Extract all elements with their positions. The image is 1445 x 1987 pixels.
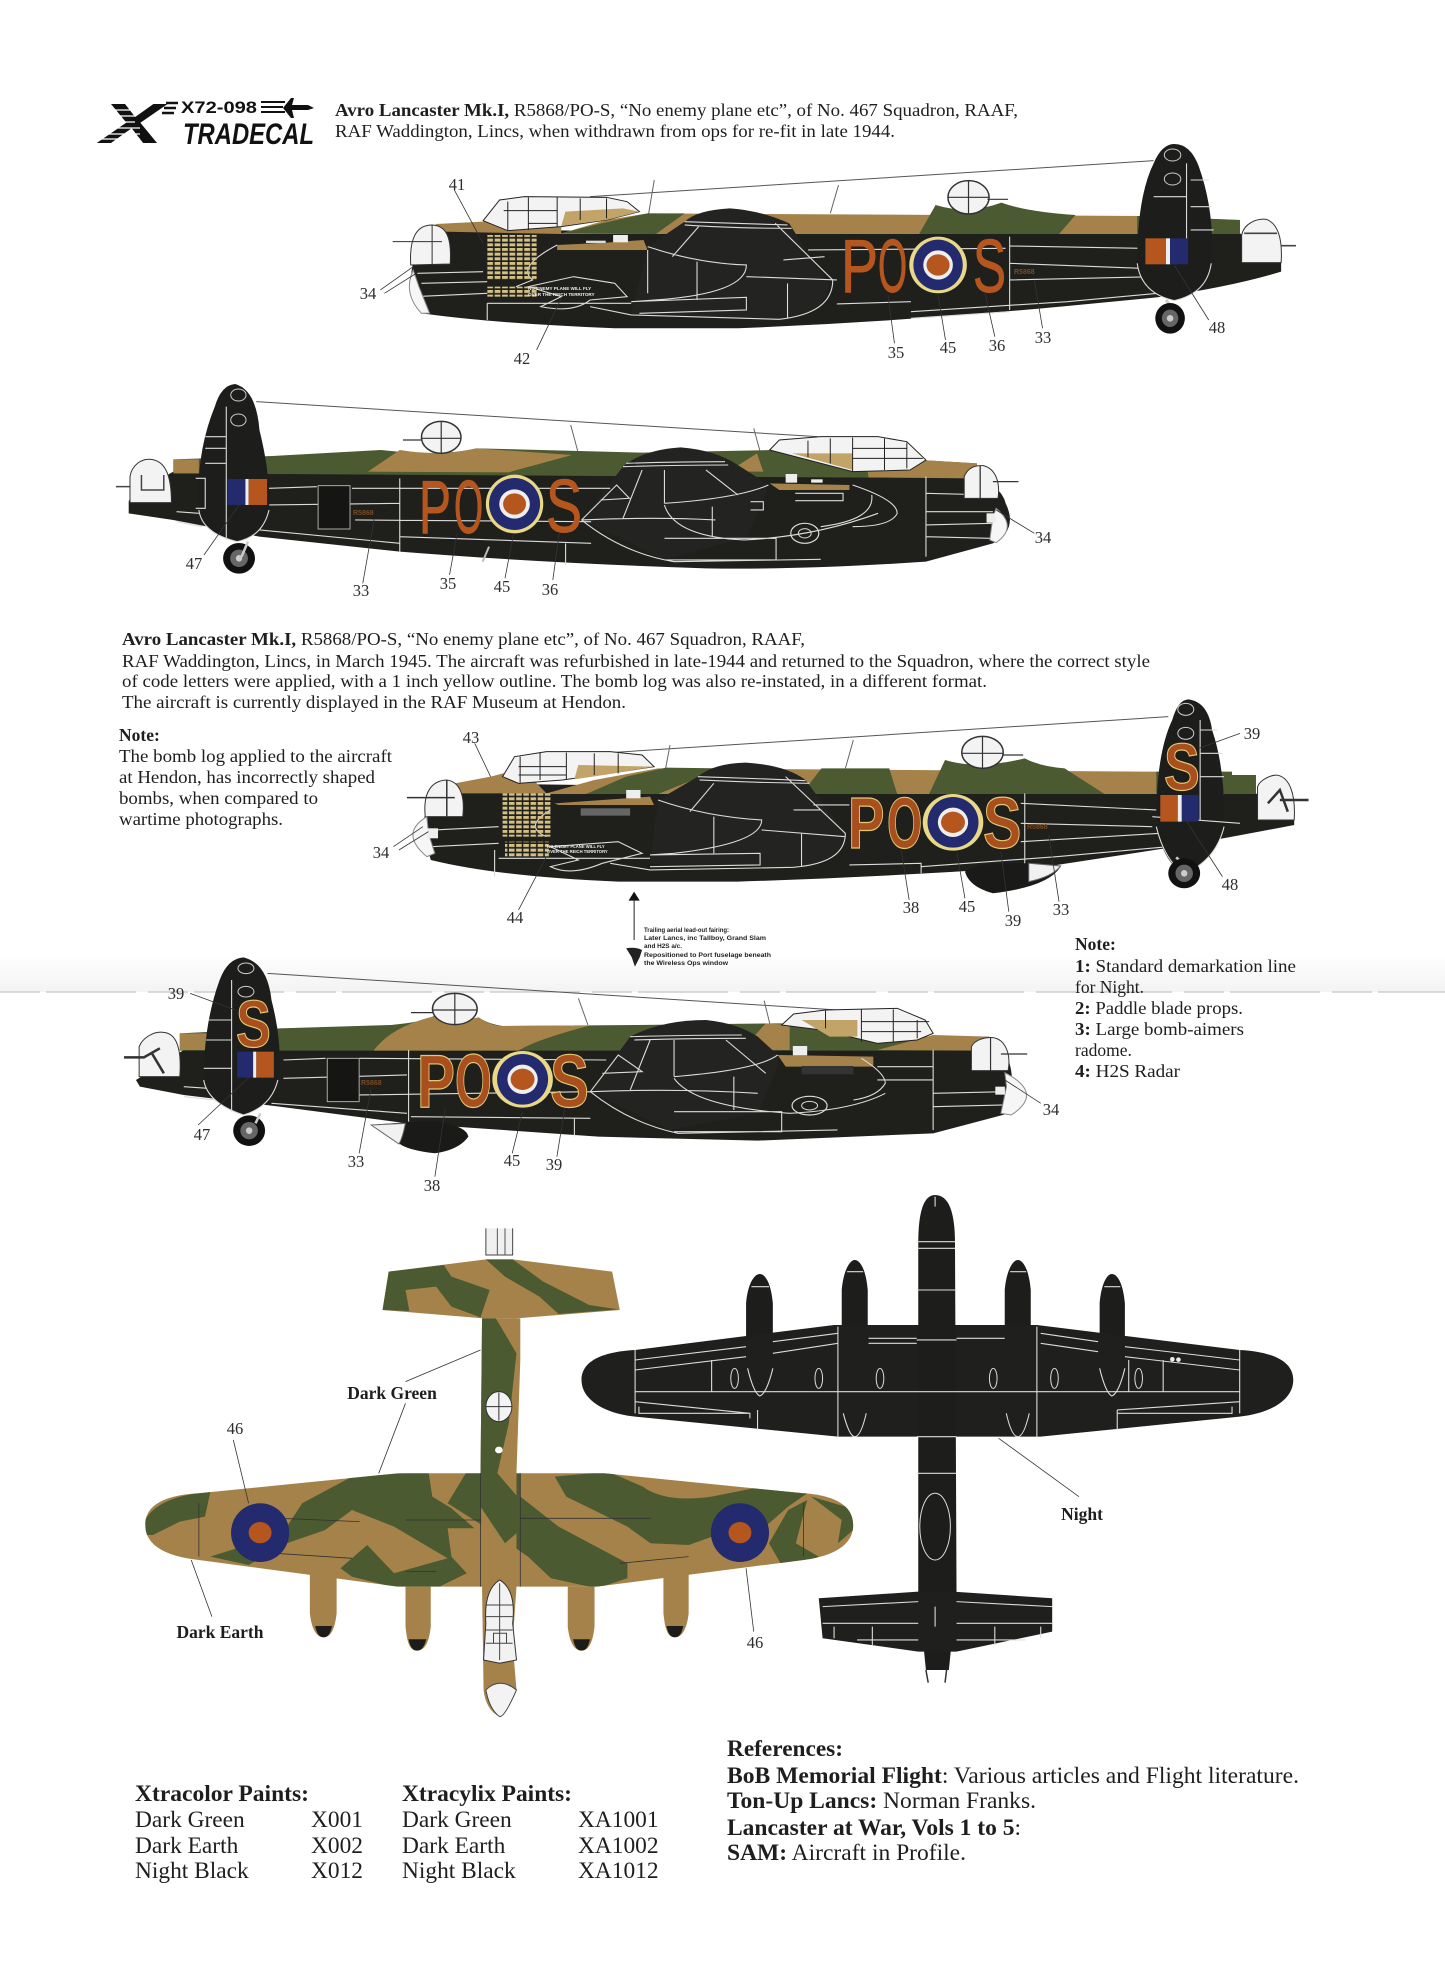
paint table: Xtracylix: Xtracylix Paints: bbox=[402, 1781, 572, 1807]
references: Ton-Up Lancs: Norman Franks. bbox=[727, 1788, 1036, 1814]
callout numbers: fourth profile: 39 bbox=[168, 984, 184, 1003]
callout numbers: roundels: 46 bbox=[747, 1633, 763, 1652]
callout numbers: third profile: 43 bbox=[463, 728, 479, 747]
callout numbers: roundels bbox=[227, 1419, 763, 1652]
aircraft plan view: upper surfaces camouflage bbox=[141, 1228, 857, 1717]
note: bomb log: at Hendon, has incorrectly shaped bbox=[119, 767, 375, 787]
callout numbers: first profile: 35 bbox=[888, 343, 904, 362]
note: numbered list: 2: Paddle blade props. bbox=[1075, 998, 1243, 1018]
aircraft profile: starboard side late 1944: R5868 bbox=[1014, 269, 1035, 276]
callout numbers: third profile: 34 bbox=[373, 843, 389, 862]
heading: first scheme caption bbox=[335, 100, 1018, 141]
aircraft profile: port side late 1944: O bbox=[454, 465, 483, 549]
paint table: Xtracylix: XA1002 bbox=[578, 1833, 659, 1859]
aircraft profile: starboard side March 1945: S bbox=[1164, 729, 1200, 804]
note: numbered list: radome. bbox=[1075, 1040, 1132, 1060]
callout numbers: second profile: 47 bbox=[186, 554, 202, 573]
callout numbers: fourth profile bbox=[168, 984, 1059, 1195]
callout numbers: fourth profile: 39 bbox=[546, 1155, 562, 1174]
callout: trailing aerial fairing: the Wireless Ops window bbox=[644, 961, 728, 967]
aircraft profile: starboard side March 1945: R5868 bbox=[1027, 824, 1048, 831]
aircraft profile: port side March 1945: R5868 bbox=[361, 1080, 382, 1087]
aircraft profile: port side late 1944: S bbox=[546, 464, 582, 548]
text block: second scheme caption: The aircraft is currently displayed in the RAF Museum at Hendon. bbox=[122, 692, 626, 712]
label: Night: Night bbox=[1061, 1504, 1103, 1524]
references: Lancaster at War, Vols 1 to 5: bbox=[727, 1815, 1021, 1841]
text block: second scheme caption: RAF Waddington, Lincs, in March 1945. The aircraft was refurbished in late-1944 and returned to the Squadron, where the correct style bbox=[122, 651, 1150, 671]
callout numbers: second profile: 36 bbox=[542, 580, 558, 599]
paint table: Xtracolor: X002 bbox=[311, 1833, 363, 1859]
callout numbers: third profile: 38 bbox=[903, 898, 919, 917]
aircraft profile: port side late 1944: R5868 bbox=[353, 510, 374, 517]
note: numbered list: 3: Large bomb-aimers bbox=[1075, 1019, 1244, 1039]
aircraft plan view: undersides Night bbox=[582, 1195, 1293, 1683]
paint table: Xtracylix: XA1012 bbox=[578, 1858, 659, 1884]
callout numbers: second profile: 35 bbox=[440, 574, 456, 593]
paint table: Xtracolor: X012 bbox=[311, 1858, 363, 1884]
aircraft profile: starboard side March 1945: O bbox=[887, 783, 922, 864]
callout numbers: first profile: 34 bbox=[360, 284, 376, 303]
callout numbers: first profile bbox=[360, 175, 1225, 368]
note: bomb log: wartime photographs. bbox=[119, 809, 283, 829]
text block: second scheme caption bbox=[122, 629, 1150, 712]
heading: first scheme caption: RAF Waddington, Lincs, when withdrawn from ops for re-fit in late 1944. bbox=[335, 121, 895, 141]
callout numbers: roundels: 46 bbox=[227, 1419, 243, 1438]
aircraft profile: port side March 1945 bbox=[124, 957, 1059, 1195]
aircraft profile: port side March 1945: S bbox=[236, 987, 271, 1061]
note: bomb log: The bomb log applied to the aircraft bbox=[119, 746, 392, 766]
callout numbers: fourth profile: 45 bbox=[504, 1151, 520, 1170]
aircraft profile: starboard side late 1944: P bbox=[841, 224, 878, 308]
callout numbers: third profile: 33 bbox=[1053, 900, 1069, 919]
callout numbers: fourth profile: 33 bbox=[348, 1152, 364, 1171]
note: numbered list: 1: Standard demarkation line bbox=[1075, 956, 1296, 976]
callout numbers: fourth profile: 38 bbox=[424, 1176, 440, 1195]
paint table: Xtracolor: Xtracolor Paints: bbox=[135, 1781, 309, 1807]
logo: Xtradecal X72-098: TRADECAL bbox=[183, 118, 314, 151]
paint table: Xtracolor: X001 bbox=[311, 1807, 363, 1833]
callout numbers: fourth profile: 47 bbox=[194, 1125, 210, 1144]
references: SAM: Aircraft in Profile. bbox=[727, 1840, 966, 1866]
references: BoB Memorial Flight: Various articles and Flight literature. bbox=[727, 1763, 1299, 1789]
aircraft profile: port side late 1944: P bbox=[419, 466, 451, 550]
aircraft profile: starboard side March 1945: S bbox=[983, 783, 1021, 863]
label: Dark Green: Dark Green bbox=[347, 1383, 437, 1403]
note: bomb log bbox=[119, 725, 392, 829]
callout numbers: second profile: 45 bbox=[494, 577, 510, 596]
callout: trailing aerial fairing: Later Lancs, inc Tallboy, Grand Slam bbox=[644, 936, 766, 942]
callout: trailing aerial fairing: and H2S a/c. bbox=[644, 944, 682, 950]
paint table: Xtracylix: Dark Earth bbox=[402, 1833, 506, 1859]
note: bomb log: Note: bbox=[119, 725, 160, 745]
callout numbers: third profile: 48 bbox=[1222, 875, 1238, 894]
references: References: bbox=[727, 1736, 843, 1762]
callout numbers: third profile: 39 bbox=[1244, 724, 1260, 743]
callout: trailing aerial fairing bbox=[644, 928, 771, 967]
text block: second scheme caption: Avro Lancaster Mk.I, R5868/PO-S, “No enemy plane etc”, of No. 467 Squadron, RAAF, bbox=[122, 629, 805, 649]
note: numbered list: for Night. bbox=[1075, 977, 1144, 997]
aircraft profile: port side March 1945: P bbox=[417, 1041, 455, 1124]
note: numbered list bbox=[1075, 934, 1296, 1081]
aircraft profile: starboard side March 1945: NO ENEMY PLANE WILL FLY bbox=[547, 844, 605, 849]
aircraft profile: port side late 1944 bbox=[116, 384, 1051, 600]
paint table: Xtracylix: Dark Green bbox=[402, 1807, 512, 1833]
heading: first scheme caption: Avro Lancaster Mk.I, R5868/PO-S, “No enemy plane etc”, of No. 467 Squadron, RAAF, bbox=[335, 100, 1018, 120]
note: numbered list: Note: bbox=[1075, 934, 1116, 954]
paint table: Xtracolor: Night Black bbox=[135, 1858, 249, 1884]
references bbox=[727, 1736, 1299, 1866]
aircraft profile: starboard side late 1944: OVER THE REICH TERRITORY bbox=[528, 292, 595, 297]
logo: Xtradecal X72-098: X bbox=[96, 92, 168, 156]
aircraft profile: starboard side late 1944: NO ENEMY PLANE WILL FLY bbox=[528, 286, 591, 291]
paint table: Xtracolor: Dark Green bbox=[135, 1807, 245, 1833]
callout numbers: first profile: 42 bbox=[514, 349, 530, 368]
callout numbers: first profile: 36 bbox=[989, 336, 1005, 355]
callout numbers: third profile: 39 bbox=[1005, 911, 1021, 930]
aircraft profile: port side March 1945: S bbox=[550, 1040, 589, 1124]
callout: trailing aerial fairing: Repositioned to Port fuselage beneath bbox=[644, 953, 771, 959]
aircraft profile: starboard side March 1945: P bbox=[848, 783, 885, 864]
callout numbers: first profile: 41 bbox=[449, 175, 465, 194]
paint table: Xtracylix bbox=[402, 1781, 659, 1884]
aircraft profile: starboard side late 1944 bbox=[360, 144, 1296, 368]
callout numbers: third profile bbox=[373, 724, 1260, 930]
callout numbers: third profile: 44 bbox=[507, 908, 523, 927]
callout: trailing aerial fairing: Trailing aerial lead-out fairing: bbox=[644, 928, 729, 934]
note: bomb log: bombs, when compared to bbox=[119, 788, 318, 808]
paint table: Xtracolor bbox=[135, 1781, 363, 1884]
paint table: Xtracolor: Dark Earth bbox=[135, 1833, 239, 1859]
callout numbers: fourth profile: 34 bbox=[1043, 1100, 1059, 1119]
callout numbers: third profile: 45 bbox=[959, 897, 975, 916]
aircraft profile: port side March 1945: O bbox=[455, 1040, 492, 1124]
aircraft profile: starboard side late 1944: S bbox=[973, 225, 1006, 309]
logo: Xtradecal X72-098 bbox=[96, 92, 314, 156]
callout numbers: second profile: 34 bbox=[1035, 528, 1051, 547]
note: numbered list: 4: H2S Radar bbox=[1075, 1061, 1180, 1081]
paint table: Xtracylix: Night Black bbox=[402, 1858, 516, 1884]
callout numbers: second profile: 33 bbox=[353, 581, 369, 600]
aircraft profile: starboard side late 1944: O bbox=[878, 224, 907, 308]
callout numbers: first profile: 48 bbox=[1209, 318, 1225, 337]
callout numbers: first profile: 33 bbox=[1035, 328, 1051, 347]
aircraft profile: starboard side March 1945: OVER THE REICH TERRITORY bbox=[547, 849, 608, 854]
label: Dark Earth: Dark Earth bbox=[176, 1622, 264, 1642]
paint table: Xtracylix: XA1001 bbox=[578, 1807, 659, 1833]
callout numbers: second profile bbox=[186, 528, 1051, 600]
callout numbers: first profile: 45 bbox=[940, 338, 956, 357]
text block: second scheme caption: of code letters were applied, with a 1 inch yellow outline. The bomb log was also re-instated, in a different format. bbox=[122, 671, 987, 691]
logo: Xtradecal X72-098: X72-098 bbox=[181, 99, 257, 117]
aircraft profile: starboard side March 1945 bbox=[373, 699, 1309, 967]
